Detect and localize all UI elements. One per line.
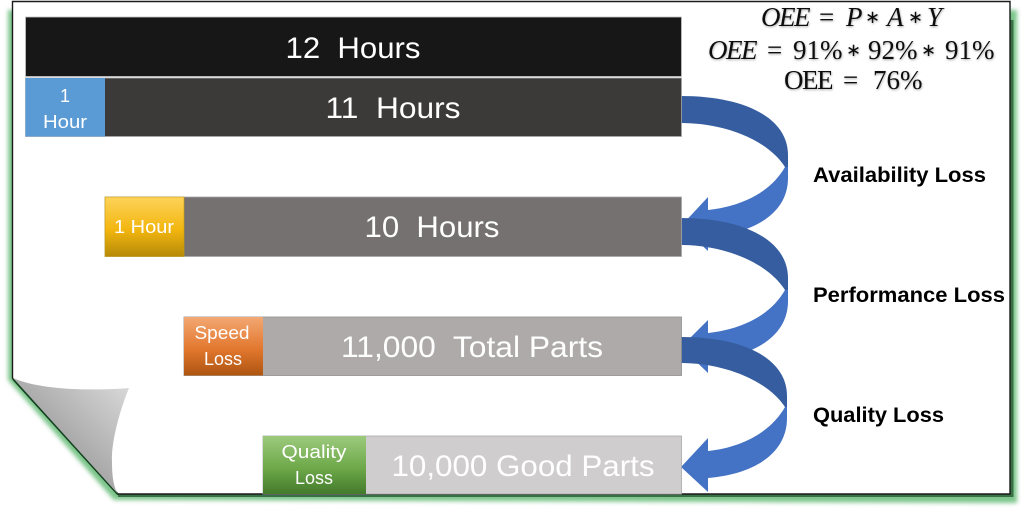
- bar: 10 hours with 1 hour block: 10 Hours: [364, 211, 500, 244]
- formula: OEE equations: OEE: [708, 35, 758, 65]
- bar: 10,000 good parts with quality loss block: Loss: [295, 468, 333, 488]
- formula: OEE equations: =: [843, 65, 858, 95]
- bar: 10 hours with 1 hour block: 1 Hour: [114, 217, 174, 237]
- formula: OEE equations: P: [845, 2, 862, 32]
- bar: 11,000 total parts with speed loss block: Speed: [194, 323, 250, 343]
- icon: page curl: [13, 378, 129, 494]
- bar: 12 hours: 12 Hours: [286, 32, 420, 65]
- bar: 10,000 good parts with quality loss block: [263, 436, 682, 494]
- formula: OEE equations: ∗: [846, 40, 861, 60]
- bar: 11,000 total parts with speed loss block: [184, 317, 682, 376]
- bar: 10 hours with 1 hour block: [105, 197, 682, 256]
- bar: 12 hours: [26, 17, 682, 76]
- arrow: quality loss: [681, 337, 787, 492]
- bar: 11 hours with 1 hour block: 11 Hours: [326, 92, 460, 125]
- formula: OEE equations: 91%: [793, 35, 842, 65]
- bar: 11,000 total parts with speed loss block: Loss: [204, 349, 242, 369]
- bar: 10,000 good parts with quality loss block: 10,000 Good Parts: [392, 450, 654, 483]
- formula: OEE equations: Y: [927, 2, 945, 32]
- bar: 11 hours with 1 hour block: [26, 78, 682, 136]
- formula: OEE equations: [708, 0, 994, 95]
- formula: OEE equations: OEE: [784, 65, 833, 95]
- arrow: performance loss: [681, 218, 788, 373]
- formula: OEE equations: 76%: [873, 65, 922, 95]
- bar: 11 hours with 1 hour block: Hour: [43, 112, 87, 132]
- formula: OEE equations: ∗: [921, 40, 936, 60]
- bar: 10,000 good parts with quality loss block: Quality: [282, 442, 346, 462]
- formula: OEE equations: OEE: [761, 2, 811, 32]
- label: availability loss: Availability Loss: [813, 164, 986, 187]
- formula: OEE equations: =: [767, 35, 782, 65]
- bar: 11 hours with 1 hour block: 1: [60, 86, 70, 106]
- formula: OEE equations: 91%: [945, 35, 994, 65]
- arrow: availability loss: [681, 96, 788, 251]
- formula: OEE equations: ∗: [908, 7, 923, 27]
- formula: OEE equations: 92%: [868, 35, 918, 65]
- label: performance loss: Performance Loss: [813, 284, 1005, 307]
- formula: OEE equations: A: [885, 2, 904, 32]
- label: quality loss: Quality Loss: [813, 404, 944, 427]
- formula: OEE equations: =: [819, 2, 834, 32]
- bar: 11,000 total parts with speed loss block: 11,000 Total Parts: [341, 331, 603, 364]
- formula: OEE equations: ∗: [865, 7, 880, 27]
